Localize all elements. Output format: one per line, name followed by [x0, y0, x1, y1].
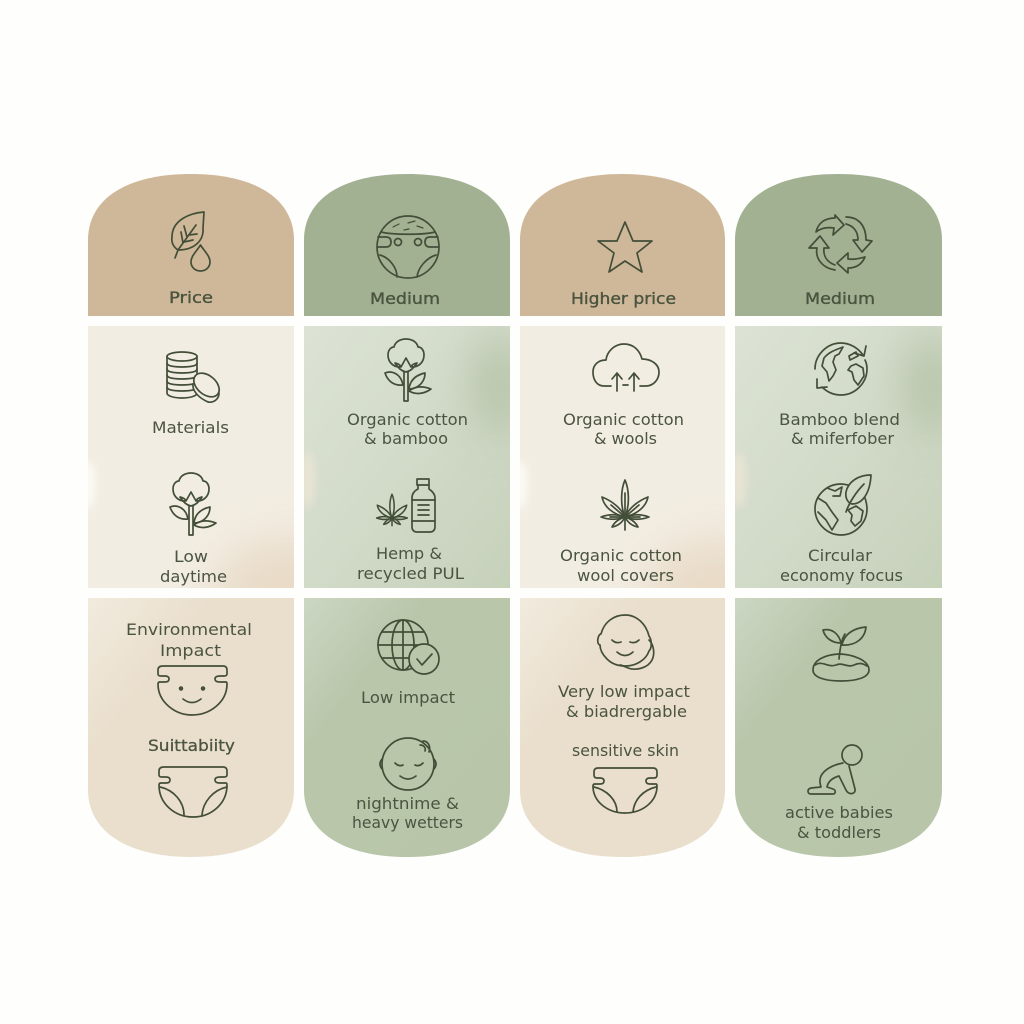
- icon: sprout in soil: [813, 627, 869, 681]
- panel: column 4 materials and use: [732, 326, 960, 588]
- label: Organic cotton wool covers: [560, 546, 682, 585]
- label: Organic cotton wool covers: Organic cotton: [560, 546, 682, 565]
- panel: column 2 impact and suitability: [304, 598, 510, 857]
- panel: column 2 materials and use: [301, 326, 528, 588]
- label: Price: Price: [169, 288, 213, 307]
- panel: column 3 materials and use: [520, 326, 725, 588]
- label: Low daytime: [160, 547, 227, 586]
- icon: smiling diaper: [158, 666, 227, 715]
- label: Environmental Impact: Environmental: [126, 620, 252, 639]
- label: Circular economy focus: [780, 546, 903, 585]
- label: Circular economy focus: economy focus: [780, 566, 903, 585]
- icon: cotton flower: [385, 339, 431, 401]
- icon: earth with leaf: [815, 475, 871, 535]
- panel: column 3 header: [520, 174, 725, 316]
- label: active babies and toddlers: active babies: [785, 803, 893, 822]
- label: Hemp and recycled PUL: [357, 544, 464, 583]
- label: nighttime and heavy wetters: heavy wetters: [352, 813, 463, 832]
- label: Organic cotton and wools: & wools: [594, 429, 657, 448]
- icon: hemp leaf: [601, 480, 649, 530]
- label: Suitability: Suittabiity: [148, 736, 235, 755]
- label: Organic cotton and wools: [563, 410, 684, 448]
- label: Bamboo blend and miferfober: & miferfober: [791, 429, 894, 448]
- label: Low daytime: Low: [174, 547, 208, 566]
- icon: cotton flower: [170, 473, 216, 535]
- icon: diaper: [159, 767, 227, 817]
- icon: hemp leaf and bottle: [377, 479, 435, 532]
- label: Organic cotton and bamboo: & bamboo: [364, 429, 448, 448]
- panel: column 4 impact and suitability: [735, 598, 942, 857]
- icon: star: [598, 222, 652, 272]
- label: Very low impact and biodegradable: Very low impact: [558, 682, 690, 701]
- label: Organic cotton wool covers: wool covers: [577, 566, 674, 585]
- label: Organic cotton and bamboo: Organic cotton: [347, 410, 468, 429]
- label: Very low impact and biodegradable: & biadrergable: [566, 702, 687, 721]
- label: Medium: Medium: [805, 289, 875, 308]
- icon: crawling baby: [808, 745, 862, 794]
- label: Hemp and recycled PUL: recycled PUL: [357, 564, 464, 583]
- label: Environmental Impact: Impact: [160, 641, 221, 660]
- label: Bamboo blend and miferfober: Bamboo blend: [779, 410, 900, 429]
- icon: earth with circular arrows: [815, 343, 867, 395]
- label: nighttime and heavy wetters: nightnime &: [356, 794, 459, 813]
- icon: sleeping baby: [598, 615, 654, 669]
- icon: coin stack: [167, 352, 224, 402]
- icon: recycling arrows: [809, 215, 872, 273]
- label: Higher price: Higher price: [571, 289, 676, 308]
- panel: column 2 header: [304, 174, 510, 316]
- panel: column 1 impact and suitability: [88, 598, 294, 857]
- label: Low impact: Low impact: [361, 688, 455, 707]
- panel: column 1 header: [88, 174, 294, 316]
- label: active babies and toddlers: [785, 803, 893, 842]
- panel: column 4 header: [735, 174, 942, 316]
- icon: globe with check mark: [378, 620, 439, 674]
- label: Low daytime: daytime: [160, 567, 227, 586]
- icon: diaper: [593, 768, 657, 813]
- label: Very low impact and biodegradable: [558, 682, 690, 721]
- label: Circular economy focus: Circular: [808, 546, 872, 565]
- label: Materials: Materials: [152, 418, 229, 437]
- label: sensitive skin: sensitive skin: [572, 741, 679, 760]
- label: Organic cotton and bamboo: [347, 410, 468, 448]
- icon: baby face: [380, 738, 436, 790]
- label: Organic cotton and wools: Organic cotton: [563, 410, 684, 429]
- icon: cloud with arrows: [593, 344, 659, 391]
- icon: leaf and water drop: [172, 212, 210, 271]
- panel: column 3 impact and suitability: [520, 598, 725, 857]
- label: Hemp and recycled PUL: Hemp &: [376, 544, 442, 563]
- panel: column 1 materials and use: [88, 326, 294, 588]
- icon: diaper in circle: [377, 216, 439, 278]
- label: active babies and toddlers: & toddlers: [797, 823, 881, 842]
- label: Medium: Medium: [370, 289, 440, 308]
- label: nighttime and heavy wetters: [352, 794, 463, 832]
- label: Environmental Impact: [126, 620, 252, 660]
- label: Bamboo blend and miferfober: [779, 410, 900, 448]
